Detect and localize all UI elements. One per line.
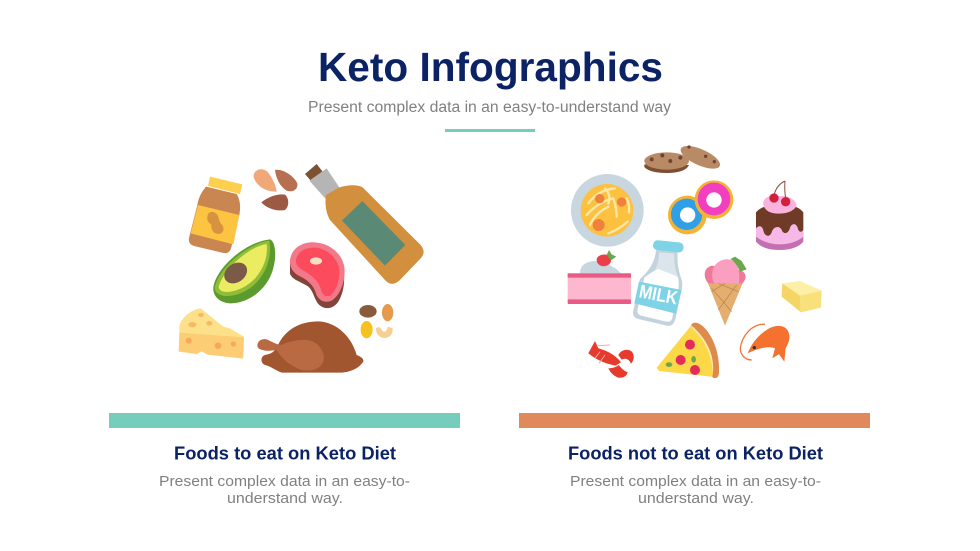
icon: almonds: [254, 169, 297, 210]
icon: peanut butter jar: [189, 177, 242, 253]
icon: oil bottle: [305, 164, 424, 284]
icon: spaghetti plate: [571, 174, 644, 247]
subtitle: Present complex data in an easy-to-understand way: [308, 99, 671, 116]
panel: foods not to eat: [519, 413, 870, 507]
description: foods not to eat: understand way.: [638, 490, 754, 507]
orange header bar: [519, 413, 870, 428]
description: foods not to eat: Present complex data in an easy-to-: [570, 473, 821, 490]
panel: keto foods illustration: [179, 164, 424, 373]
icon: mixed nuts: [359, 304, 393, 338]
icon: cookies: [644, 141, 723, 173]
title: Keto Infographics: [318, 44, 663, 90]
icon: lobster: [588, 341, 634, 378]
heading: foods to eat: Foods to eat on Keto Diet: [174, 442, 396, 464]
icon: avocado: [213, 239, 275, 303]
teal header bar: [109, 413, 460, 428]
icon: milk bottle: MILK: [637, 280, 680, 308]
icon: strawberry cake: [568, 250, 631, 304]
panel: non-keto foods illustration: [568, 141, 822, 378]
icon: milk bottle: [633, 240, 684, 326]
description: foods to eat: Present complex data in an easy-to-: [159, 473, 410, 490]
icon: roast chicken: [257, 321, 363, 373]
icon: chocolate cake: [756, 181, 803, 250]
icon: steak: [290, 242, 345, 308]
description: foods to eat: understand way.: [227, 490, 343, 507]
icon: ice cream cone: [705, 257, 747, 326]
title accent line: [445, 129, 535, 132]
panel: foods to eat: [109, 413, 460, 507]
icon: donuts: [668, 180, 733, 234]
heading: foods not to eat: Foods not to eat on Keto Diet: [568, 442, 823, 464]
icon: pizza slice: [657, 323, 719, 378]
icon: butter: [782, 281, 822, 312]
icon: shrimp: [740, 324, 789, 362]
icon: cheese: [179, 308, 244, 359]
